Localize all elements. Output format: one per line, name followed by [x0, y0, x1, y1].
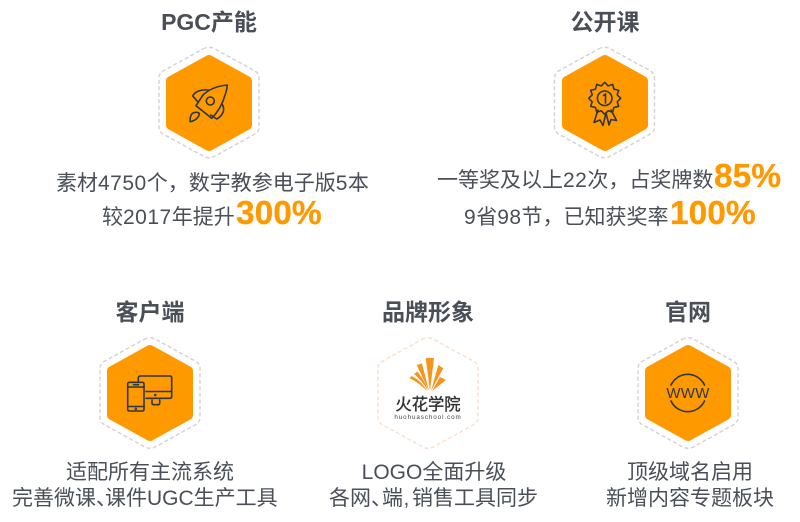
- heading: 品牌形象: 品牌形象: [382, 299, 474, 325]
- hexagon icon: rocket: [159, 47, 259, 158]
- hexagon icon: www: [638, 338, 738, 448]
- heading: PGC产能: PGC产能: [161, 9, 257, 35]
- text: 客户端 description: [12, 461, 278, 510]
- text: PGC产能 description: [56, 172, 369, 232]
- text: 公开课 description: 9省98节，已知获奖率: [464, 206, 669, 229]
- icon: phone and monitor: [128, 376, 172, 411]
- text: 品牌形象 description: 各网、: [329, 487, 392, 510]
- text: 品牌形象 description: 销售工具同步: [412, 487, 538, 510]
- text: 品牌形象 description: [329, 461, 538, 510]
- text: 官网 description: 新增内容专题板块: [606, 487, 774, 510]
- logo wordmark: 火花学院: [395, 396, 461, 414]
- text: 客户端 description: 课件UGC生产工具: [105, 487, 278, 510]
- hexagon icon: award ribbon: [554, 47, 654, 158]
- heading: 客户端: 客户端: [116, 299, 184, 325]
- text: 公开课 description: 100%: [670, 195, 756, 232]
- text: 公开课 description: [437, 158, 781, 232]
- heading: 公开课: 公开课: [570, 9, 640, 35]
- logo url: huohuaschool.com: [394, 414, 462, 421]
- text: 官网 description: [606, 461, 774, 510]
- text: 客户端 description: 完善微课、: [12, 487, 117, 510]
- heading: 官网: 官网: [665, 299, 711, 325]
- text: 品牌形象 description: ,: [404, 487, 409, 510]
- icon: www globe: WWW: [666, 385, 710, 402]
- text: 客户端 description: 适配所有主流系统: [66, 461, 234, 484]
- text: 官网 description: 顶级域名启用: [627, 461, 753, 484]
- text: 品牌形象 description: 端: [382, 487, 403, 510]
- logo rays: [409, 358, 446, 391]
- text: 公开课 description: 85%: [714, 158, 781, 195]
- hexagon logo: 火花学院: [378, 338, 478, 448]
- hexagon icon: devices: [100, 338, 200, 448]
- text: PGC产能 description: 较2017年提升: [102, 206, 235, 229]
- text: 公开课 description: 一等奖及以上22次，占奖牌数: [437, 169, 713, 192]
- text: PGC产能 description: 素材4750个，数字教参电子版5本: [56, 172, 369, 195]
- icon: award ribbon: [589, 82, 621, 126]
- text: PGC产能 description: 300%: [236, 195, 322, 232]
- icon: rocket: [190, 85, 227, 122]
- text: 品牌形象 description: LOGO全面升级: [362, 461, 506, 484]
